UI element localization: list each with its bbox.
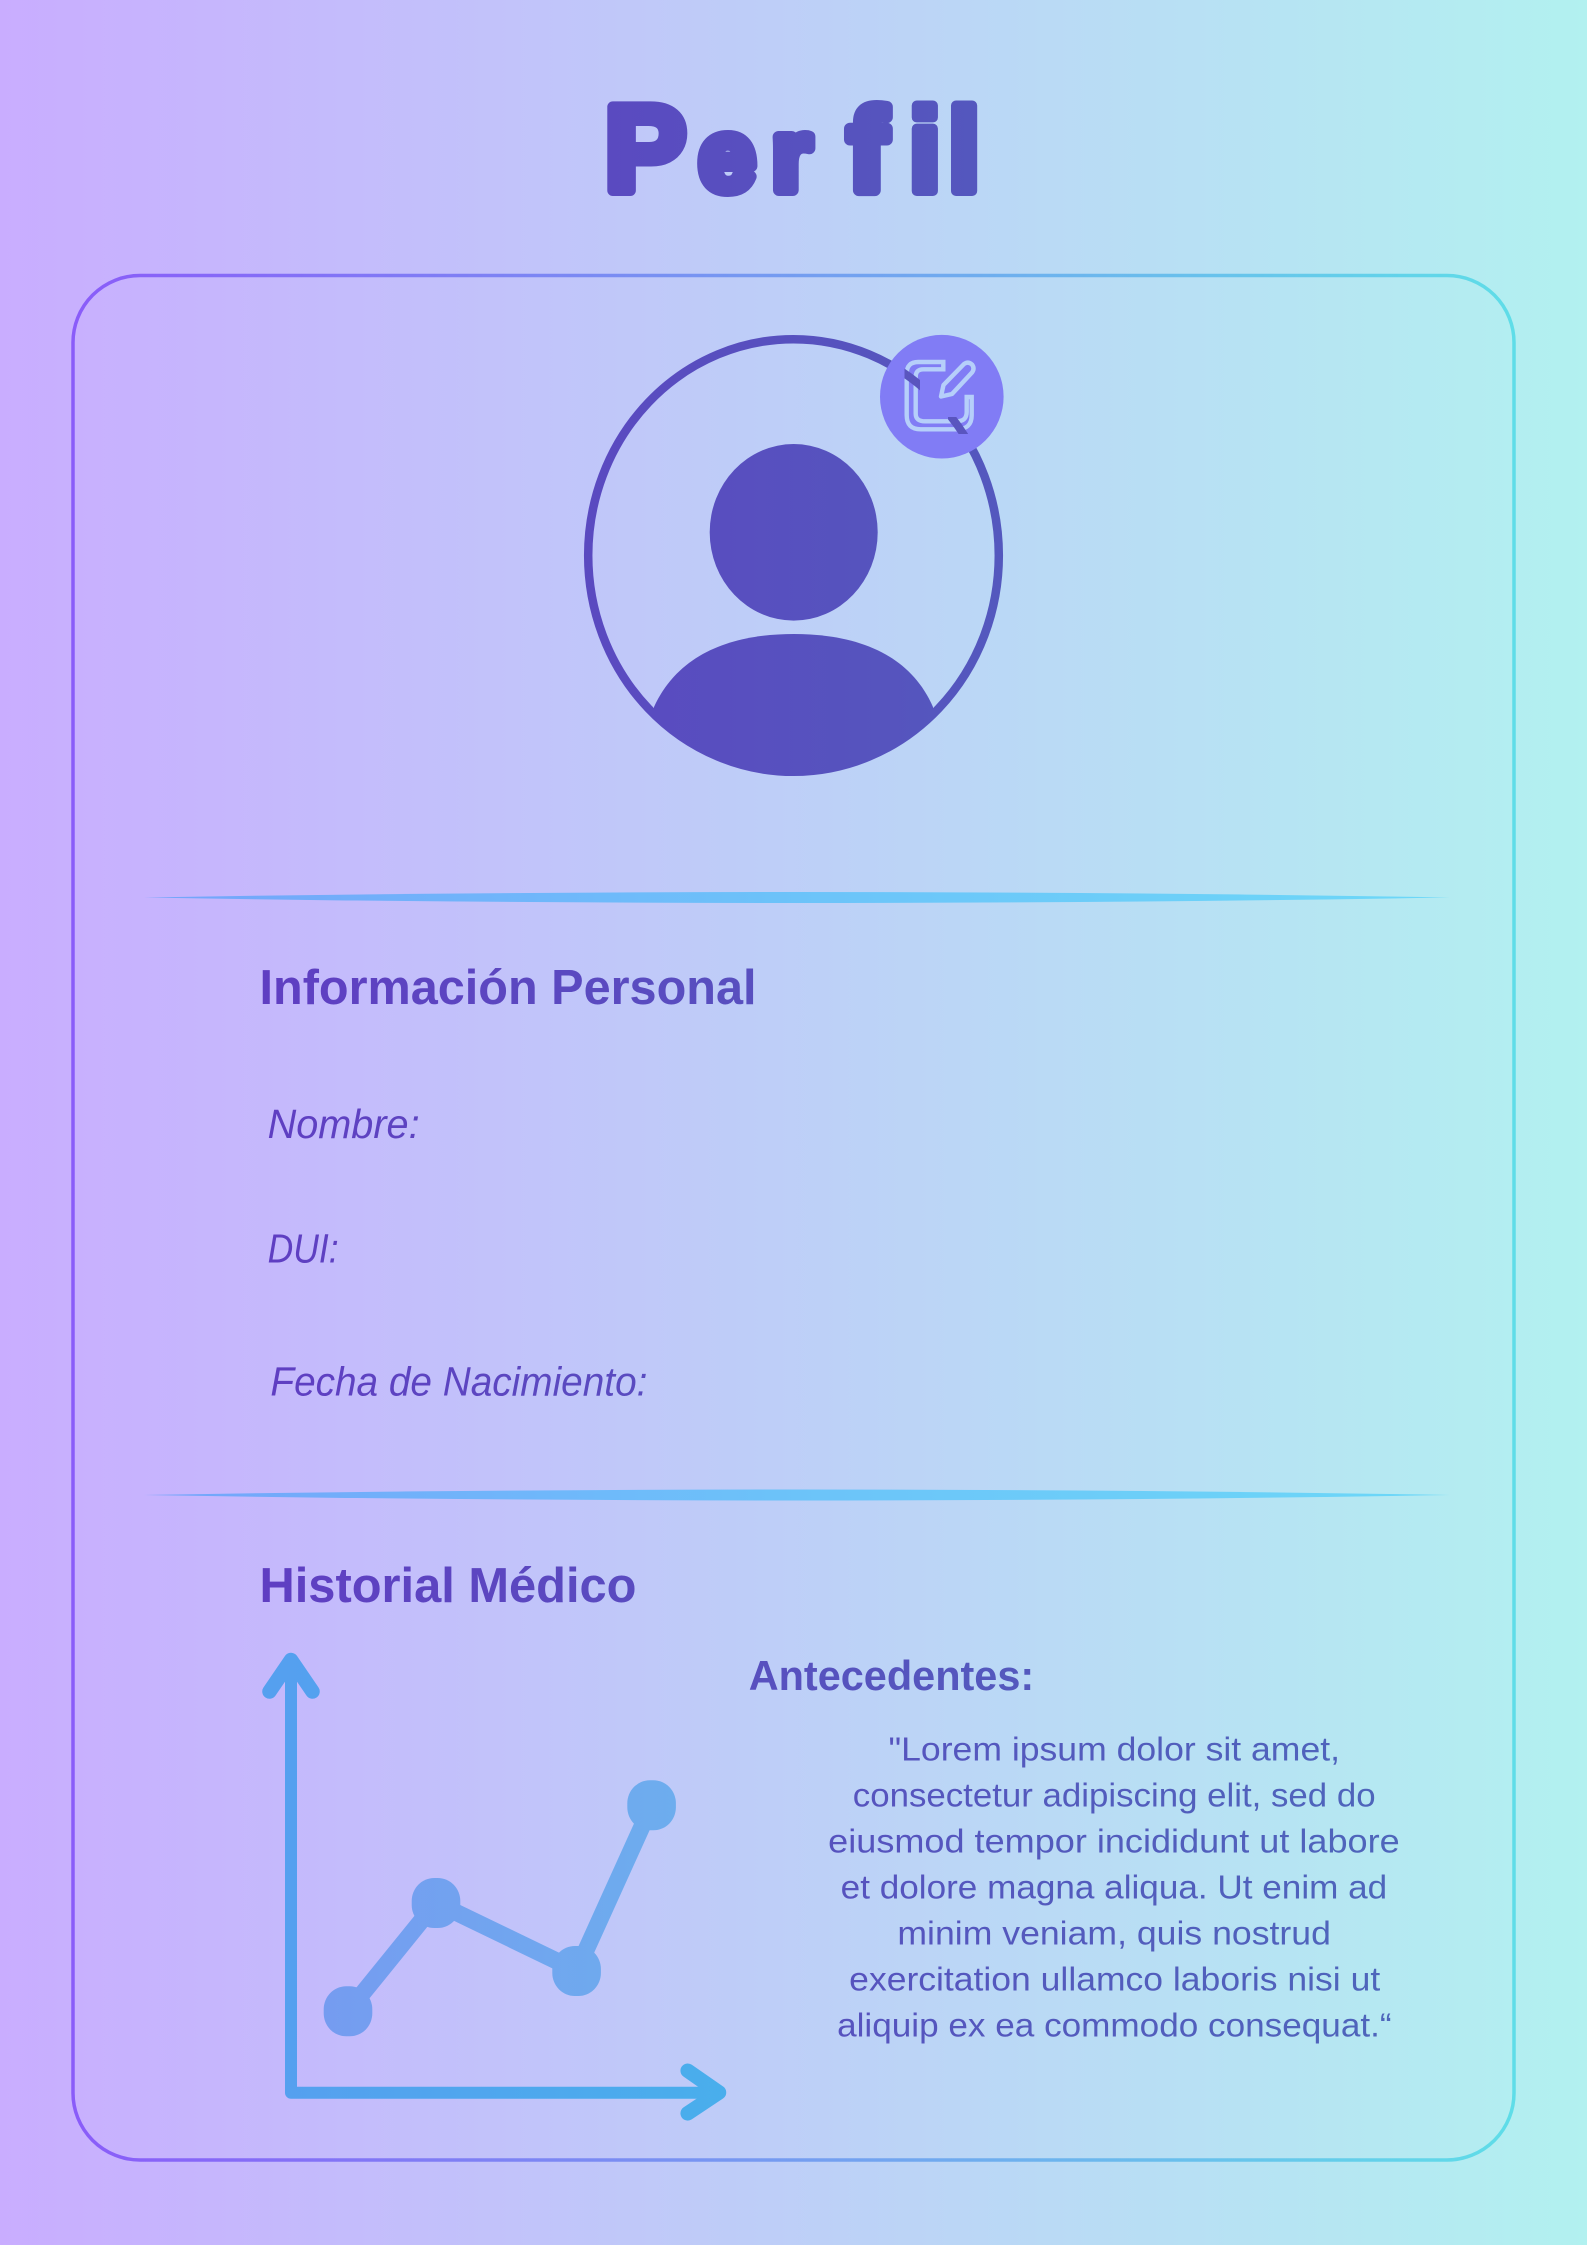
text block: lorem ipsum	[828, 1730, 1400, 2044]
text block: lorem ipsum: "Lorem ipsum dolor sit amet,	[888, 1730, 1340, 1768]
text block: lorem ipsum: aliquip ex ea commodo consequat.“	[837, 2006, 1392, 2044]
field: birth date: Fecha de Nacimiento:	[270, 1358, 647, 1404]
avatar head	[710, 444, 878, 621]
icon: user avatar	[588, 339, 999, 800]
field: DUI: DUI:	[268, 1226, 339, 1272]
title: i	[908, 85, 941, 217]
avatar ring	[588, 339, 999, 772]
subheading: background: Antecedentes:	[749, 1652, 1034, 1699]
text block: lorem ipsum: eiusmod tempor incididunt ut labore	[828, 1822, 1400, 1860]
text block: lorem ipsum: minim veniam, quis nostrud	[897, 1914, 1331, 1952]
text block: lorem ipsum: exercitation ullamco laboris nisi ut	[849, 1960, 1380, 1998]
heading: personal information: Información Personal	[260, 961, 756, 1015]
edit square outline	[907, 362, 972, 429]
pencil	[941, 363, 974, 396]
chart points	[324, 1780, 676, 2036]
avatar shoulders	[654, 634, 933, 768]
text block: lorem ipsum: et dolore magna aliqua. Ut enim ad	[841, 1868, 1387, 1906]
chart line	[348, 1805, 652, 2011]
icon: edit badge	[880, 334, 1004, 458]
text block: lorem ipsum: consectetur adipiscing elit, sed do	[853, 1776, 1376, 1814]
panel: profile card outline	[73, 276, 1514, 2160]
field: name: Nombre:	[268, 1101, 420, 1147]
title: r	[772, 100, 811, 212]
title: f	[848, 85, 887, 215]
title: P	[605, 80, 686, 216]
title: e	[699, 100, 755, 212]
chart: line chart icon	[270, 1660, 719, 2113]
badge circle	[880, 335, 1004, 459]
title: l	[948, 85, 981, 217]
chart axes	[270, 1660, 719, 2113]
ring showing through badge	[904, 368, 968, 434]
heading: medical history: Historial Médico	[260, 1559, 636, 1613]
